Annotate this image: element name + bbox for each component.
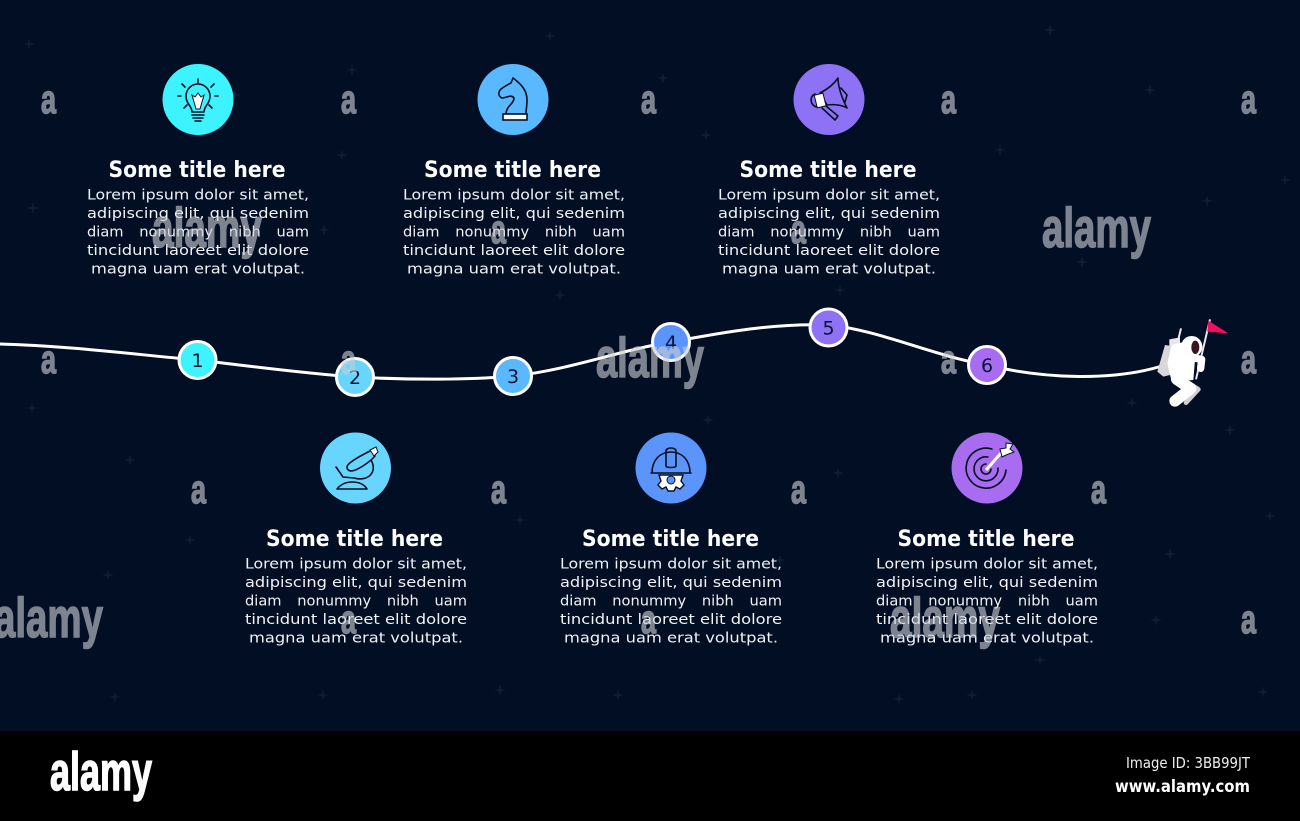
icon: astronaut with flag <box>1157 319 1228 403</box>
step marker 2 <box>336 358 374 396</box>
text block 3: Some title here <box>740 158 916 183</box>
text block 6 <box>876 527 1098 646</box>
text block 5: diam nonummy nibh uam <box>560 594 782 610</box>
step marker 6 <box>968 346 1006 384</box>
watermark overlay: a <box>1091 468 1107 512</box>
step marker 3 <box>494 358 532 394</box>
step marker 5: 5 <box>822 318 835 340</box>
icon circle: megaphone <box>794 64 864 135</box>
watermark overlay: a <box>791 468 807 512</box>
text block 1: magna uam erat volutpat. <box>91 262 305 278</box>
text block 2: Some title here <box>424 158 601 183</box>
text block 3: diam nonummy nibh uam <box>718 224 940 240</box>
text block 1 <box>87 158 309 278</box>
step marker 4: 4 <box>665 332 677 354</box>
watermark overlay: a <box>1241 598 1257 642</box>
watermark overlay: a <box>941 338 957 382</box>
step marker 2: 2 <box>349 367 361 389</box>
step marker 4 <box>652 324 690 360</box>
step marker 6: 6 <box>981 355 993 377</box>
text block 2: magna uam erat volutpat. <box>407 262 621 278</box>
watermark overlay: a <box>191 468 207 512</box>
watermark overlay: a <box>1241 78 1257 122</box>
text block 2 <box>403 158 625 278</box>
watermark overlay: a <box>641 598 657 642</box>
icon circle: target and arrow <box>952 432 1022 504</box>
text block 2: diam nonummy nibh uam <box>403 224 625 240</box>
timeline curve <box>0 325 1162 379</box>
text block 3: tincidunt laoreet elit dolore <box>718 243 940 259</box>
step marker 5 <box>810 309 847 346</box>
text block 1: diam nonummy nibh uam <box>87 224 309 240</box>
text block 2: adipiscing elit, qui sedenim <box>403 206 625 222</box>
watermark overlay: alamy <box>152 196 262 259</box>
watermark overlay: alamy <box>596 326 704 389</box>
watermark overlay: a <box>641 78 657 122</box>
text block 3: magna uam erat volutpat. <box>722 262 936 278</box>
text block 5 <box>560 527 782 646</box>
text block 6: magna uam erat volutpat. <box>880 630 1094 646</box>
watermark overlay: a <box>41 338 57 382</box>
text block 5: tincidunt laoreet elit dolore <box>560 612 782 628</box>
text block 4: Some title here <box>266 527 443 552</box>
watermark overlay: alamy <box>1042 196 1151 259</box>
watermark overlay: a <box>1241 338 1257 382</box>
text block 6: Lorem ipsum dolor sit amet, <box>876 556 1098 572</box>
text block 4: tincidunt laoreet elit dolore <box>245 612 467 628</box>
text block 5: Lorem ipsum dolor sit amet, <box>560 556 782 572</box>
watermark overlay: a <box>941 78 957 122</box>
watermark overlay: a <box>491 468 507 512</box>
text block 3 <box>718 158 940 278</box>
text block 3: adipiscing elit, qui sedenim <box>718 206 940 222</box>
footer website: www.alamy.com <box>1115 777 1250 797</box>
icon circle: helmet and gear <box>636 432 706 504</box>
text block 6: tincidunt laoreet elit dolore <box>876 612 1098 628</box>
text block 2: tincidunt laoreet elit dolore <box>403 243 625 259</box>
footer image id: Image ID: 3BB99JT <box>1126 754 1251 772</box>
step marker 1: 1 <box>191 350 204 372</box>
text block 4: adipiscing elit, qui sedenim <box>245 575 467 591</box>
text block 5: adipiscing elit, qui sedenim <box>560 575 782 591</box>
text block 4: diam nonummy nibh uam <box>245 594 467 610</box>
text block 1: Some title here <box>108 158 286 183</box>
watermark overlay: alamy <box>890 586 1000 649</box>
watermark overlay: a <box>341 598 357 642</box>
text block 3: Lorem ipsum dolor sit amet, <box>718 188 940 204</box>
icon circle: light bulb <box>162 64 234 135</box>
text block 6: adipiscing elit, qui sedenim <box>876 575 1098 591</box>
watermark overlay: a <box>41 78 57 122</box>
text block 1: tincidunt laoreet elit dolore <box>87 243 309 259</box>
watermark overlay <box>0 78 1257 649</box>
text block 5: Some title here <box>582 527 759 552</box>
icon circle: chess knight <box>478 64 548 135</box>
watermark overlay: a <box>341 338 357 382</box>
footer logo: alamy <box>50 742 152 802</box>
text block 6: diam nonummy nibh uam <box>876 594 1098 610</box>
text block 6: Some title here <box>898 527 1074 552</box>
text block 4: Lorem ipsum dolor sit amet, <box>245 556 467 572</box>
footer band <box>0 731 1300 821</box>
watermark overlay: a <box>791 208 807 252</box>
text block 4 <box>245 527 467 646</box>
watermark overlay: a <box>491 208 507 252</box>
text block 2: Lorem ipsum dolor sit amet, <box>403 188 625 204</box>
text block 1: adipiscing elit, qui sedenim <box>87 206 309 222</box>
step marker 1 <box>179 342 216 378</box>
text block 5: magna uam erat volutpat. <box>564 630 778 646</box>
step marker 3: 3 <box>507 366 519 388</box>
text block 1: Lorem ipsum dolor sit amet, <box>87 188 309 204</box>
watermark overlay: a <box>341 78 357 122</box>
text block 4: magna uam erat volutpat. <box>249 630 463 646</box>
icon circle: microscope <box>320 432 391 504</box>
